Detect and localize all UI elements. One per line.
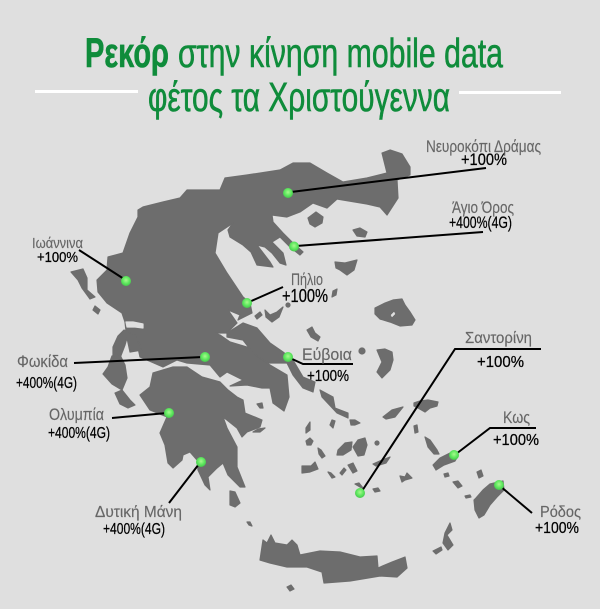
Cyclades (320, 390, 348, 418)
callout: Σαντορίνη: +100% (477, 354, 524, 371)
callout: Κως: Κως (503, 408, 530, 427)
callout: Νευροκόπι Δράμας (283, 137, 541, 198)
callout: Νευροκόπι Δράμας: Νευροκόπι Δράμας (426, 137, 541, 156)
callout: Ιωάννινα: +100% (37, 249, 78, 266)
callout: Άγιο Όρος: Άγιο Όρος (452, 198, 514, 217)
callout: Ρόδος: +100% (535, 520, 579, 537)
north Aegean islands (308, 212, 323, 227)
Rhodes (474, 481, 504, 518)
Ambracian gulf (126, 322, 143, 328)
callout: Ιωάννινα (32, 235, 131, 286)
callout: Δυτική Μάνη (95, 457, 206, 538)
title: φέτος τα Χριστούγεννα (148, 74, 450, 120)
callout: Δυτική Μάνη: Δυτική Μάνη (95, 504, 182, 521)
callout: Πήλιο (242, 270, 328, 308)
callout: Κως (449, 408, 539, 460)
callout: Ολυμπία: Ολυμπία (49, 405, 104, 424)
callout: Άγιο Όρος (289, 198, 514, 252)
callout: Πήλιο: Πήλιο (291, 270, 323, 289)
callout: Εύβοια: +100% (307, 368, 349, 385)
callout: Ρόδος: Ρόδος (540, 504, 581, 521)
callout: Σαντορίνη (355, 330, 541, 498)
title: Ρεκόρ (85, 29, 169, 76)
callout: Ρόδος (494, 480, 581, 537)
callout: Νευροκόπι Δράμας: +100% (461, 150, 507, 169)
east Aegean islands (375, 299, 415, 326)
callout: Σαντορίνη: Σαντορίνη (465, 330, 532, 347)
callout: Δυτική Μάνη: +400%(4G) (103, 521, 165, 538)
Lefkada and Acarnania coast (113, 330, 142, 358)
callout: Κως: +100% (493, 432, 539, 449)
Karpathos and Kasos (443, 523, 453, 550)
callout: Πήλιο: +100% (282, 286, 328, 306)
map of Greece (71, 150, 504, 591)
mainland (97, 150, 410, 411)
Ionian islands (71, 269, 95, 299)
callout: Εύβοια (283, 345, 353, 385)
Euboea (227, 323, 315, 392)
callout: Εύβοια: Εύβοια (302, 345, 352, 364)
callout: Φωκίδα: +400%(4G) (16, 375, 77, 392)
callout: Φωκίδα: Φωκίδα (17, 352, 68, 371)
callout: Άγιο Όρος: +400%(4G) (449, 213, 512, 232)
title (85, 29, 503, 120)
Crete (260, 535, 407, 583)
callout: Ολυμπία: +400%(4G) (48, 425, 110, 442)
Peloponnese (140, 367, 262, 490)
Saronic and Kythira islands (257, 403, 263, 408)
callout: Ιωάννινα: Ιωάννινα (32, 235, 83, 252)
callout: Ολυμπία (48, 405, 174, 442)
callout: Φωκίδα (16, 352, 210, 392)
